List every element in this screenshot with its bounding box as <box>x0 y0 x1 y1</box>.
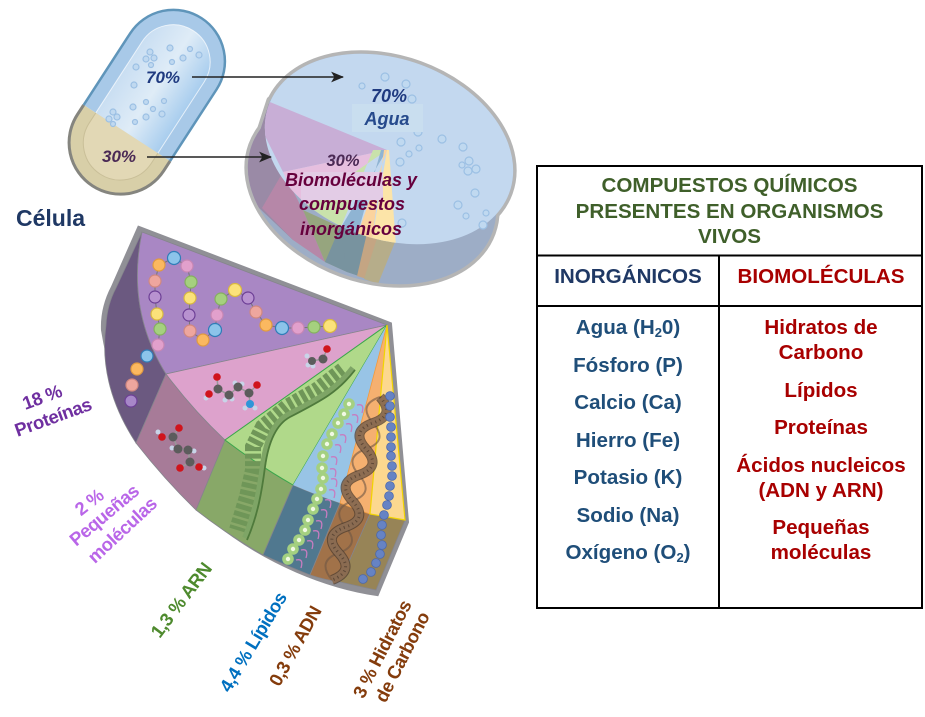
label: small molecules: Pequeñas <box>65 480 143 550</box>
pie label box biomolecules <box>301 172 383 200</box>
capsule label 70%: 70% <box>146 68 180 87</box>
pie label biomolecules: Biomoléculas y <box>285 170 418 190</box>
label: RNA: 1,3 % ARN <box>146 559 216 641</box>
side faces <box>105 232 405 590</box>
label: small molecules: 2 % <box>70 484 107 520</box>
inorganic list: Sodio (Na) <box>577 504 679 527</box>
label: small molecules: moléculas <box>83 493 161 567</box>
inorganic list: ) <box>684 541 691 564</box>
inorganic list <box>565 316 691 565</box>
pie chart cell composition <box>244 50 517 288</box>
biomolecule list: Ácidos nucleicos <box>736 454 906 477</box>
inorganic list: Potasio (K) <box>574 466 682 489</box>
inorganic list: 2 <box>655 325 662 340</box>
small molecules <box>156 345 331 472</box>
label: lipids: 4,4 % Lípidos <box>215 588 291 696</box>
pie label box water <box>352 104 423 132</box>
pie label water <box>364 86 410 129</box>
biomolecule list: Proteínas <box>774 416 868 439</box>
inorganic list: Fósforo (P) <box>573 354 683 377</box>
DNA helix <box>325 397 387 580</box>
biomolecule list: moléculas <box>771 541 871 564</box>
pie label biomolecules: inorgánicos <box>300 219 402 239</box>
RNA strand <box>237 368 355 540</box>
carbohydrate chain <box>359 392 396 583</box>
biomolecule list <box>736 316 906 564</box>
pie bubbles <box>359 73 489 229</box>
table title <box>576 174 883 248</box>
inorganic list: Agua (H <box>576 316 655 339</box>
label: proteins: Proteínas <box>12 393 94 441</box>
inorganic list: Calcio (Ca) <box>574 391 682 414</box>
biomolecule list: (ADN y ARN) <box>758 479 884 502</box>
inorganic list: Hierro (Fe) <box>576 429 680 452</box>
label: carbohydrates: de Carbono <box>370 608 434 706</box>
pie label water: Agua <box>364 109 410 129</box>
table title: PRESENTES EN ORGANISMOS <box>576 200 883 223</box>
label: small molecules <box>65 480 161 567</box>
table title: COMPUESTOS QUÍMICOS <box>602 174 857 197</box>
biomolecule list: Hidratos de <box>764 316 878 339</box>
column heading biomolecules: BIOMOLÉCULAS <box>737 265 905 288</box>
capsule bubbles <box>106 45 202 126</box>
column heading inorganic: INORGÁNICOS <box>554 265 702 288</box>
biomolecule list: Pequeñas <box>772 516 870 539</box>
biomolecule list: Lípidos <box>784 379 858 402</box>
table grid <box>537 166 922 608</box>
top faces <box>137 232 387 374</box>
label: DNA: 0,3 % ADN <box>265 602 325 689</box>
arrow 70% <box>192 76 343 78</box>
label: proteins: 18 % <box>19 380 65 414</box>
cell capsule <box>68 8 226 196</box>
pie label biomolecules <box>285 152 418 239</box>
protein bead chain <box>125 252 336 407</box>
pie label biomolecules: compuestos <box>299 194 405 214</box>
inorganic list: Oxígeno (O <box>565 541 676 564</box>
pie label biomolecules: 30% <box>326 152 360 170</box>
table <box>537 166 922 608</box>
capsule label 30%: 30% <box>102 147 136 166</box>
label: carbohydrates: 3 % Hidratos <box>348 597 416 701</box>
lipid chain <box>284 400 363 568</box>
table title: VIVOS <box>698 225 761 248</box>
cell label: Célula <box>16 205 85 231</box>
pie label water: 70% <box>371 86 407 106</box>
arrow 30% <box>147 156 271 158</box>
inorganic list: 0) <box>662 316 680 339</box>
biomolecule list: Carbono <box>779 341 863 364</box>
inorganic list: 2 <box>676 550 684 565</box>
wedge: biomolecule composition <box>103 228 407 594</box>
